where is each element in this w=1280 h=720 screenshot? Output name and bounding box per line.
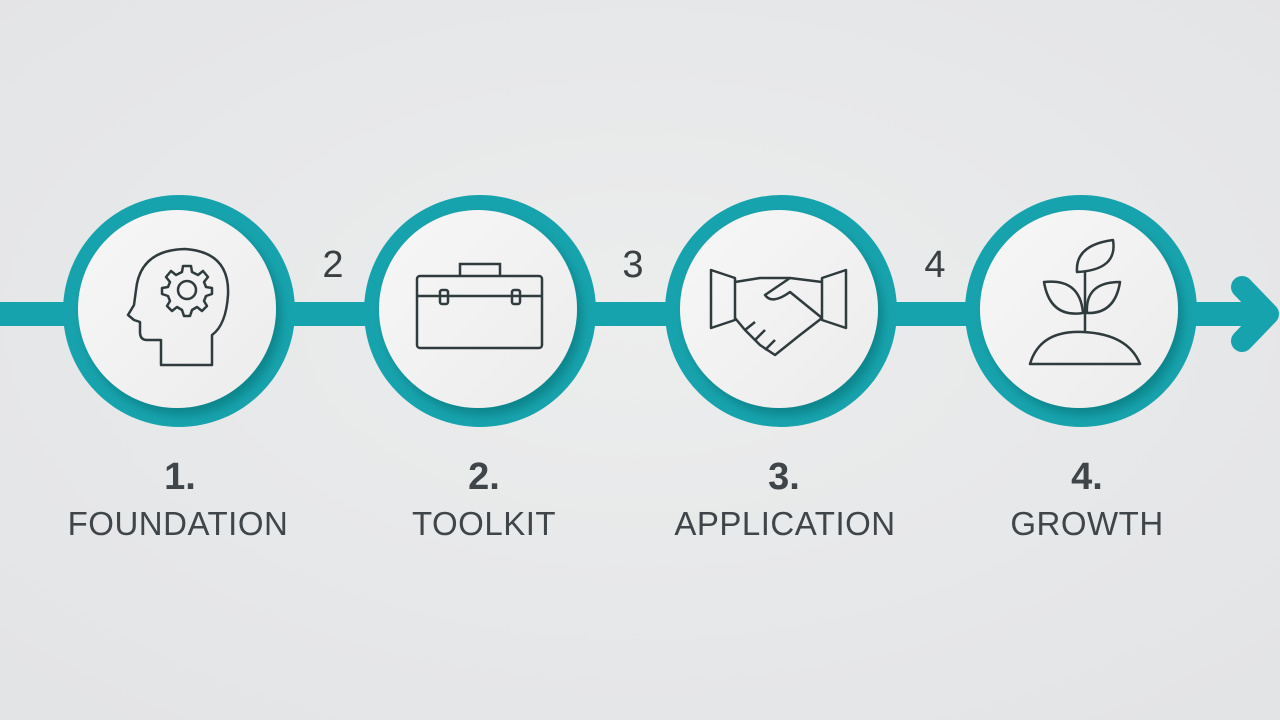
step labels: 3. xyxy=(768,456,800,498)
step 4: growth xyxy=(965,195,1197,427)
connector numbers: 2 xyxy=(322,244,344,286)
icon: toolbox xyxy=(417,264,542,348)
step labels: 4. xyxy=(1071,456,1103,498)
connector numbers: 4 xyxy=(924,244,946,286)
step labels: 2. xyxy=(468,456,500,498)
step labels: FOUNDATION xyxy=(68,505,288,542)
icon: plant xyxy=(1030,240,1140,364)
step 3: application xyxy=(665,195,897,427)
step 2: toolkit xyxy=(364,195,596,427)
connector numbers: 3 xyxy=(622,244,644,286)
step 1: foundation xyxy=(63,195,295,427)
step labels: APPLICATION xyxy=(674,505,896,542)
icon: head with gear xyxy=(128,249,228,365)
icon: handshake xyxy=(711,270,846,355)
timeline arrow xyxy=(0,287,1268,341)
step labels: TOOLKIT xyxy=(412,505,556,542)
step labels: 1. xyxy=(164,456,196,498)
connector numbers xyxy=(322,244,946,286)
step labels: GROWTH xyxy=(1010,505,1164,542)
step labels xyxy=(68,456,1164,542)
